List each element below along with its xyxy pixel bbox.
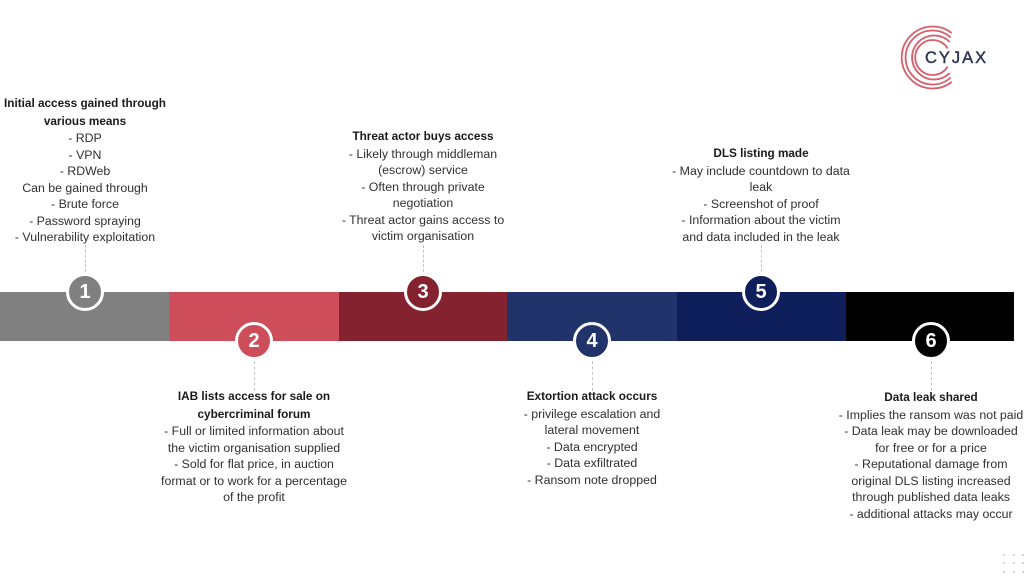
text: step 1: - VPN (69, 148, 101, 162)
step marker 4 (573, 322, 611, 360)
text: step 2: - Full or limited information about (164, 424, 344, 438)
text: step 4: - Data exfiltrated (547, 456, 637, 470)
text: step 1: various means (44, 114, 126, 128)
text: step 2: format or to work for a percentage (161, 474, 347, 488)
text: step 4 (524, 390, 660, 486)
text: step 2: cybercriminal forum (198, 408, 310, 420)
text: step 3: negotiation (393, 196, 453, 210)
connector 1 (85, 245, 86, 272)
text: step 2: - Sold for flat price, in auction (174, 457, 334, 471)
step marker 2 (235, 322, 273, 360)
text: step 3: (escrow) service (378, 163, 468, 177)
text: step 1: Initial access gained through (4, 97, 166, 110)
text: step 6: through published data leaks (852, 490, 1010, 504)
logo: Cyjax: CYJAX (925, 49, 988, 67)
text: step 1: - RDP (68, 131, 102, 145)
text: step 1: - Vulnerability exploitation (15, 230, 155, 244)
text: step 2: the victim organisation supplied (168, 440, 340, 454)
connector 5 (761, 245, 762, 272)
step marker 4: 4 (586, 330, 598, 352)
step marker 5: 5 (755, 281, 767, 303)
text: step 1: Can be gained through (22, 180, 148, 194)
step marker 5 (742, 273, 780, 311)
text: step 1: - Brute force (51, 197, 119, 211)
text: step 4: - Ransom note dropped (527, 472, 657, 486)
text: step 6: - Implies the ransom was not paid (839, 408, 1023, 422)
text: step 6: for free or for a price (875, 440, 987, 454)
text: step 2: IAB lists access for sale on (178, 390, 330, 403)
text: step 2: of the profit (223, 490, 285, 504)
text: step 4: - Data encrypted (546, 440, 638, 454)
connector 2 (254, 361, 255, 391)
text: step 3 (342, 130, 504, 243)
text: step 2 (161, 390, 347, 504)
connector 3 (423, 245, 424, 272)
text: step 4: - privilege escalation and (524, 406, 660, 420)
connector 4 (592, 361, 593, 391)
text: step 6: Data leak shared (884, 391, 978, 404)
text: step 6: - Data leak may be downloaded (844, 424, 1018, 438)
step marker 3: 3 (417, 281, 429, 303)
step marker 2: 2 (248, 330, 260, 352)
text: step 4: lateral movement (545, 423, 639, 437)
step marker 1: 1 (79, 281, 91, 303)
text: step 5: and data included in the leak (682, 230, 840, 244)
text: step 6: original DLS listing increased (851, 474, 1011, 488)
step marker 1 (66, 273, 104, 311)
text: step 1: - RDWeb (60, 164, 110, 178)
text: step 5: - Screenshot of proof (703, 196, 819, 210)
text: step 1: - Password spraying (29, 214, 141, 228)
text: step 3: Threat actor buys access (352, 130, 494, 143)
step marker 6: 6 (925, 330, 937, 352)
step marker 3 (404, 273, 442, 311)
text: step 4: Extortion attack occurs (527, 390, 657, 403)
text: step 5 (672, 147, 850, 244)
text: step 3: - Often through private (361, 180, 485, 194)
decorative dots (1003, 554, 1024, 573)
text: step 5: DLS listing made (713, 147, 809, 160)
text: step 6: - Reputational damage from (854, 457, 1008, 471)
text: step 5: leak (750, 180, 772, 194)
connector 6 (931, 361, 932, 391)
text: step 3: - Likely through middleman (349, 146, 497, 160)
text: step 6: - additional attacks may occur (849, 506, 1013, 520)
text: step 5: - Information about the victim (681, 213, 841, 227)
step marker 6 (912, 322, 950, 360)
text: step 1 (4, 97, 166, 244)
logo: Cyjax (900, 26, 988, 90)
text: step 3: victim organisation (372, 229, 474, 243)
text: step 5: - May include countdown to data (672, 164, 850, 178)
text: step 6 (839, 391, 1023, 520)
timeline bar (0, 292, 1014, 341)
text: step 3: - Threat actor gains access to (342, 212, 504, 226)
